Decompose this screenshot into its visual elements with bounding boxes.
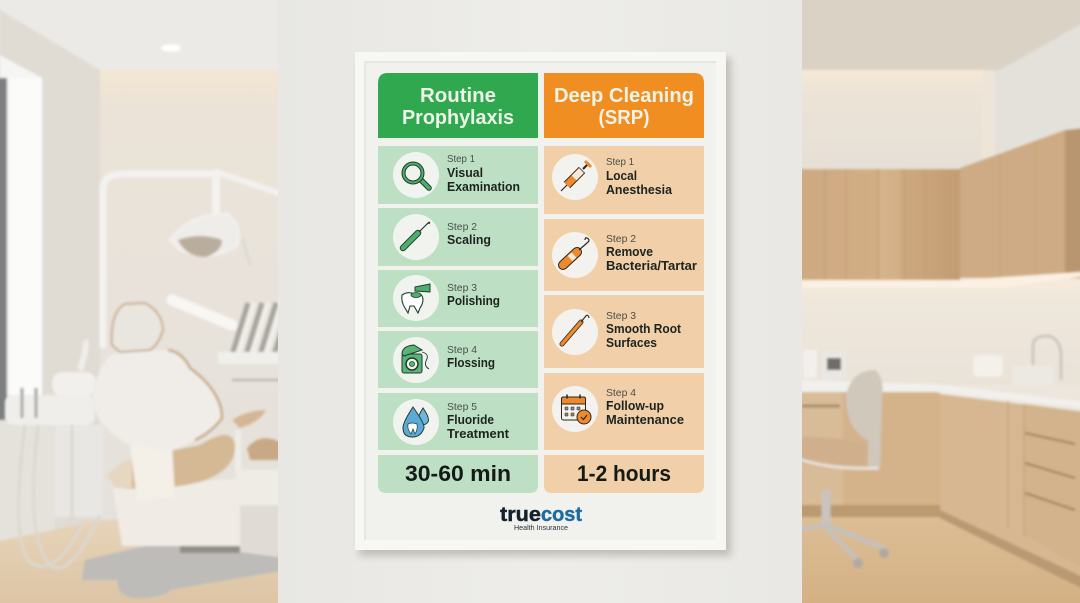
- step row: Remove Bacteria/Tartar: [544, 219, 704, 291]
- icon: syringe: [561, 161, 591, 191]
- patient chair: [82, 303, 285, 598]
- step row: Fluoride Treatment: Step 5: [447, 401, 477, 413]
- step row: Visual Examination: [378, 146, 538, 204]
- icon: root planing instrument: [562, 315, 589, 344]
- counter items: [803, 336, 1061, 385]
- logo: truecost Health Insurance: [500, 504, 582, 532]
- step row: Smooth Root Surfaces: [544, 295, 704, 368]
- step row: Visual Examination: Visual: [447, 166, 483, 180]
- poster frame: [355, 52, 731, 556]
- icon: calendar with check: [562, 394, 591, 424]
- center wall: [278, 0, 802, 603]
- logo: truecost Health Insurance: cost: [541, 504, 582, 526]
- instrument tray: [172, 300, 285, 380]
- heading: Routine Prophylaxis: Routine: [420, 85, 496, 107]
- step row: Flossing: Flossing: [447, 356, 495, 370]
- column: Routine Prophylaxis: [378, 73, 538, 493]
- step row: Follow-up Maintenance: Maintenance: [606, 413, 684, 427]
- upper cabinets: [795, 128, 1080, 280]
- step row: Local Anesthesia: [544, 146, 704, 214]
- heading: Routine Prophylaxis: Prophylaxis: [402, 107, 514, 129]
- step row: Remove Bacteria/Tartar: Bacteria/Tartar: [606, 259, 697, 273]
- countertop: [795, 380, 1080, 408]
- background: dental treatment room: [0, 0, 285, 603]
- step row: Follow-up Maintenance: Follow-up: [606, 399, 664, 413]
- step row: Fluoride Treatment: [378, 393, 538, 450]
- step row: Polishing: Step 3: [447, 282, 477, 294]
- step row: Scaling: Step 2: [447, 221, 477, 233]
- icon: scaler tool: [403, 222, 430, 248]
- heading: Deep Cleaning (SRP): (SRP): [598, 107, 650, 129]
- icon: tooth and polish tube: [402, 284, 430, 313]
- heading: Deep Cleaning (SRP): [544, 73, 704, 138]
- step row: Smooth Root Surfaces: Surfaces: [606, 336, 657, 350]
- column: Deep Cleaning (SRP): [544, 73, 704, 493]
- delivery unit: [5, 340, 103, 568]
- step row: Visual Examination: Step 1: [447, 153, 475, 165]
- step row: Local Anesthesia: Step 1: [606, 156, 634, 168]
- step row: Local Anesthesia: Anesthesia: [606, 183, 673, 197]
- background: kitchen-style cabinetry room: [795, 0, 1080, 603]
- step row: Polishing: Polishing: [447, 294, 500, 308]
- logo: truecost Health Insurance: true: [500, 504, 541, 526]
- step row: Fluoride Treatment: Treatment: [447, 427, 510, 441]
- icon: magnifying glass: [402, 162, 429, 188]
- step row: Scaling: [378, 208, 538, 266]
- step row: Polishing: [378, 270, 538, 327]
- logo: truecost Health Insurance: Health Insurance: [514, 525, 568, 532]
- step row: Remove Bacteria/Tartar: Step 2: [606, 233, 636, 245]
- backsplash: [795, 280, 1080, 385]
- step row: Scaling: Scaling: [447, 233, 491, 247]
- lower cabinets: [795, 390, 1080, 585]
- step row: Follow-up Maintenance: [544, 373, 704, 450]
- step row: Fluoride Treatment: Fluoride: [447, 413, 494, 427]
- icon: cleaning tool: [563, 238, 589, 265]
- step row: Remove Bacteria/Tartar: Remove: [606, 245, 653, 259]
- step row: Smooth Root Surfaces: Step 3: [606, 310, 636, 322]
- dental light arm: [103, 172, 285, 345]
- icon: floss container: [402, 345, 429, 373]
- duration: 30-60 min: [378, 455, 538, 493]
- step row: Flossing: [378, 331, 538, 388]
- duration: 1-2 hours: 1-2 hours: [577, 461, 671, 486]
- heading: Routine Prophylaxis: [378, 73, 538, 138]
- stool chair: [795, 370, 889, 568]
- step row: Flossing: Step 4: [447, 344, 477, 356]
- duration: 30-60 min: 30-60 min: [405, 461, 511, 486]
- step row: Smooth Root Surfaces: Smooth Root: [606, 322, 682, 336]
- step row: Visual Examination: Examination: [447, 180, 520, 194]
- floor: [795, 517, 1080, 603]
- icon: fluoride drops and tooth: [403, 407, 428, 437]
- step row: Follow-up Maintenance: Step 4: [606, 387, 636, 399]
- heading: Deep Cleaning (SRP): Deep Cleaning: [554, 85, 694, 107]
- step row: Local Anesthesia: Local: [606, 169, 637, 183]
- duration: 1-2 hours: [544, 455, 704, 493]
